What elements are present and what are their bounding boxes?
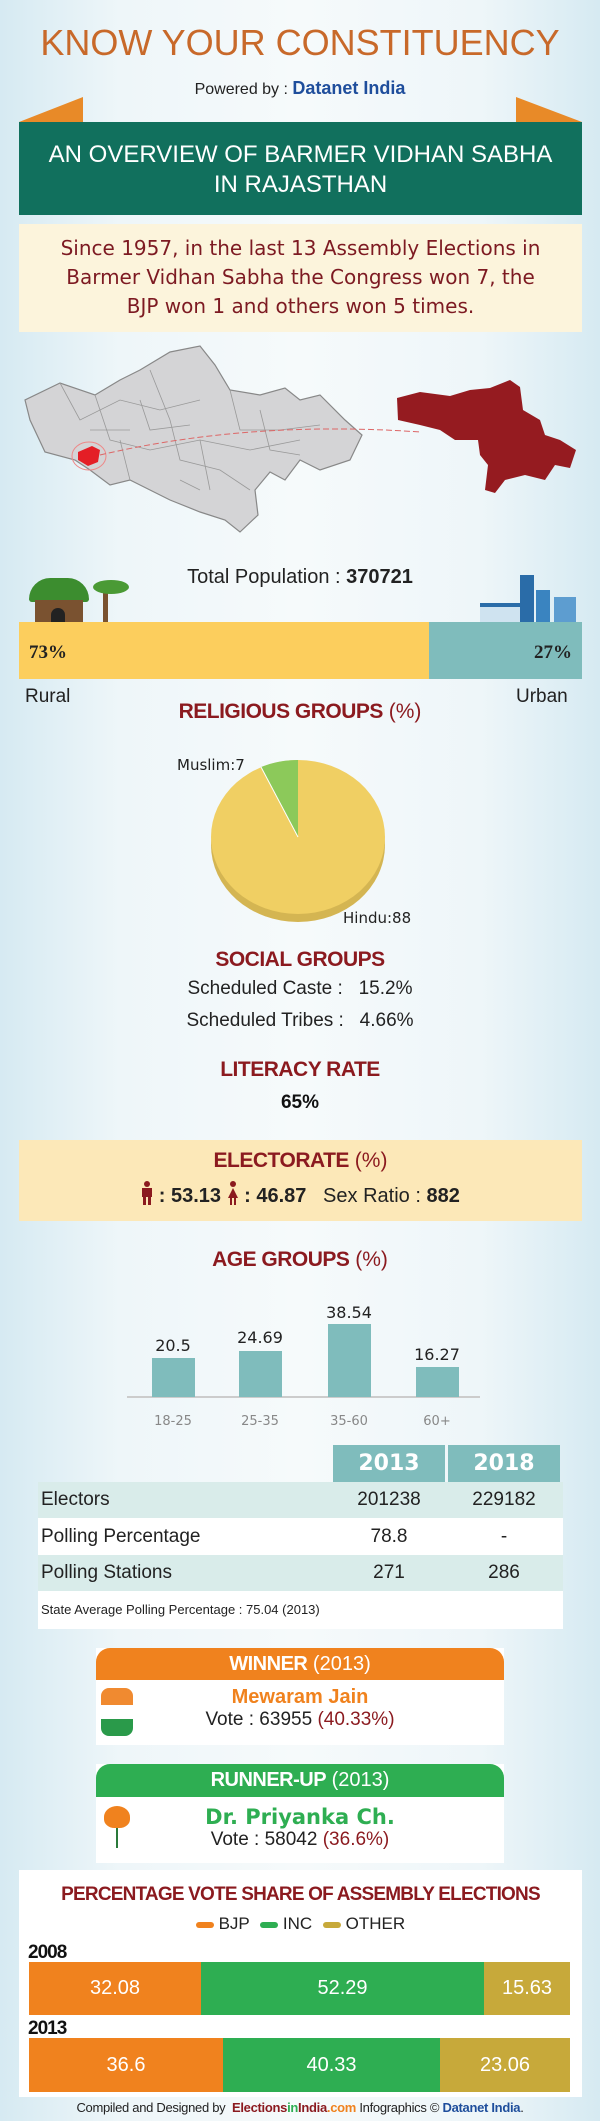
label urban: Urban bbox=[516, 686, 568, 707]
age bar chart: 24.69 bbox=[237, 1328, 283, 1347]
header banner: AN OVERVIEW OF BARMER VIDHAN SABHA bbox=[49, 141, 552, 168]
label rural: Rural bbox=[25, 686, 70, 707]
pie label hindu: Hindu:88 bbox=[343, 909, 411, 927]
literacy: 65% bbox=[281, 1092, 319, 1113]
bar 2008: 32.08 bbox=[90, 1977, 140, 1999]
bar 2008: 15.63 bbox=[502, 1977, 552, 1999]
stats table: Polling Stations bbox=[41, 1562, 172, 1583]
age bar chart: 20.5 bbox=[155, 1336, 191, 1355]
social groups: SOCIAL GROUPS bbox=[215, 948, 385, 971]
age bar chart: 25-35 bbox=[241, 1414, 279, 1429]
stats table: 229182 bbox=[472, 1489, 536, 1510]
map bbox=[24, 345, 576, 533]
summary text: Since 1957, in the last 13 Assembly Elections in bbox=[61, 236, 540, 260]
stats table: 78.8 bbox=[370, 1526, 407, 1547]
powered by: Powered by : Datanet India bbox=[195, 78, 405, 98]
age bar chart: 60+ bbox=[423, 1414, 451, 1429]
summary text: Barmer Vidhan Sabha the Congress won 7, the bbox=[66, 265, 535, 289]
bar 2008: 52.29 bbox=[317, 1977, 368, 1999]
electorate panel: ELECTORATE (%) bbox=[214, 1149, 387, 1172]
bar 2013: 36.6 bbox=[107, 2054, 145, 2076]
age bar chart: 38.54 bbox=[326, 1303, 372, 1322]
year 2008: 2008 bbox=[28, 1942, 66, 1963]
social groups: Scheduled Tribes : 4.66% bbox=[186, 1010, 414, 1031]
bar 2013 bbox=[29, 2038, 570, 2092]
age bar chart: 18-25 bbox=[154, 1414, 192, 1429]
stats table: 286 bbox=[488, 1562, 520, 1583]
electorate panel: : 53.13 : 46.87 Sex Ratio : 882 bbox=[159, 1185, 460, 1207]
winner card: Vote : 63955 (40.33%) bbox=[205, 1709, 395, 1730]
pie label muslim: Muslim:7 bbox=[177, 756, 245, 774]
electorate panel bbox=[19, 1140, 582, 1221]
stats table: State Average Polling Percentage : 75.04 (2013) bbox=[41, 1602, 320, 1617]
title: KNOW YOUR CONSTITUENCY bbox=[40, 22, 560, 63]
stats table: 201238 bbox=[357, 1489, 421, 1510]
footer: Compiled and Designed by ElectionsinIndia.com Infographics © Datanet India. bbox=[76, 2100, 524, 2115]
icon: buildings bbox=[480, 575, 576, 622]
header banner: IN RAJASTHAN bbox=[214, 171, 387, 198]
winner card: Mewaram Jain bbox=[232, 1686, 368, 1708]
bar 2013: 23.06 bbox=[480, 2054, 530, 2076]
summary text: BJP won 1 and others won 5 times. bbox=[127, 294, 474, 318]
stats table: Polling Percentage bbox=[41, 1526, 200, 1547]
stats table: Electors bbox=[41, 1489, 110, 1510]
rural urban bar bbox=[19, 622, 582, 679]
literacy: LITERACY RATE bbox=[220, 1058, 380, 1081]
stats table: 2013 bbox=[358, 1451, 420, 1476]
legend: BJP INC OTHER bbox=[219, 1914, 405, 1933]
runner-up card: Dr. Priyanka Ch. bbox=[205, 1805, 395, 1829]
icon: congress hand bbox=[101, 1688, 133, 1736]
icon: hut bbox=[29, 578, 129, 622]
vote share panel bbox=[19, 1870, 582, 2097]
age heading: AGE GROUPS (%) bbox=[212, 1248, 388, 1271]
runner-up card bbox=[96, 1764, 504, 1863]
total population: Total Population : 370721 bbox=[187, 566, 413, 588]
social groups bbox=[186, 948, 414, 1031]
bar 2013: 40.33 bbox=[306, 2054, 357, 2076]
runner-up card: RUNNER-UP (2013) bbox=[211, 1769, 389, 1791]
pie chart bbox=[177, 756, 411, 927]
icon: female bbox=[228, 1181, 238, 1205]
runner-up card: Vote : 58042 (36.6%) bbox=[211, 1829, 389, 1850]
ribbon folds bbox=[19, 97, 83, 122]
icon: male bbox=[142, 1181, 152, 1205]
stats table: 2018 bbox=[473, 1451, 535, 1476]
winner card bbox=[96, 1648, 504, 1745]
bar 2008 bbox=[29, 1962, 570, 2015]
summary text bbox=[19, 224, 582, 332]
age bar chart: 16.27 bbox=[414, 1345, 460, 1364]
age bar chart bbox=[127, 1303, 480, 1429]
icon: lotus bbox=[104, 1806, 130, 1848]
stats table: 271 bbox=[373, 1562, 405, 1583]
religious heading: RELIGIOUS GROUPS (%) bbox=[179, 700, 421, 723]
map: rajasthan bbox=[25, 346, 420, 532]
vote share title: PERCENTAGE VOTE SHARE OF ASSEMBLY ELECTIONS bbox=[61, 1884, 540, 1905]
year 2013: 2013 bbox=[28, 2018, 66, 2039]
literacy bbox=[220, 1058, 380, 1113]
winner card: WINNER (2013) bbox=[229, 1653, 371, 1675]
stats table bbox=[38, 1445, 563, 1629]
rural urban bar: 73% bbox=[29, 642, 67, 663]
header banner bbox=[19, 122, 582, 215]
social groups: Scheduled Caste : 15.2% bbox=[188, 978, 412, 999]
map: constituency bbox=[397, 380, 576, 493]
age bar chart: 35-60 bbox=[330, 1414, 368, 1429]
map: highlight bbox=[78, 446, 100, 466]
rural urban bar: 27% bbox=[534, 642, 572, 663]
stats table: - bbox=[501, 1526, 507, 1547]
